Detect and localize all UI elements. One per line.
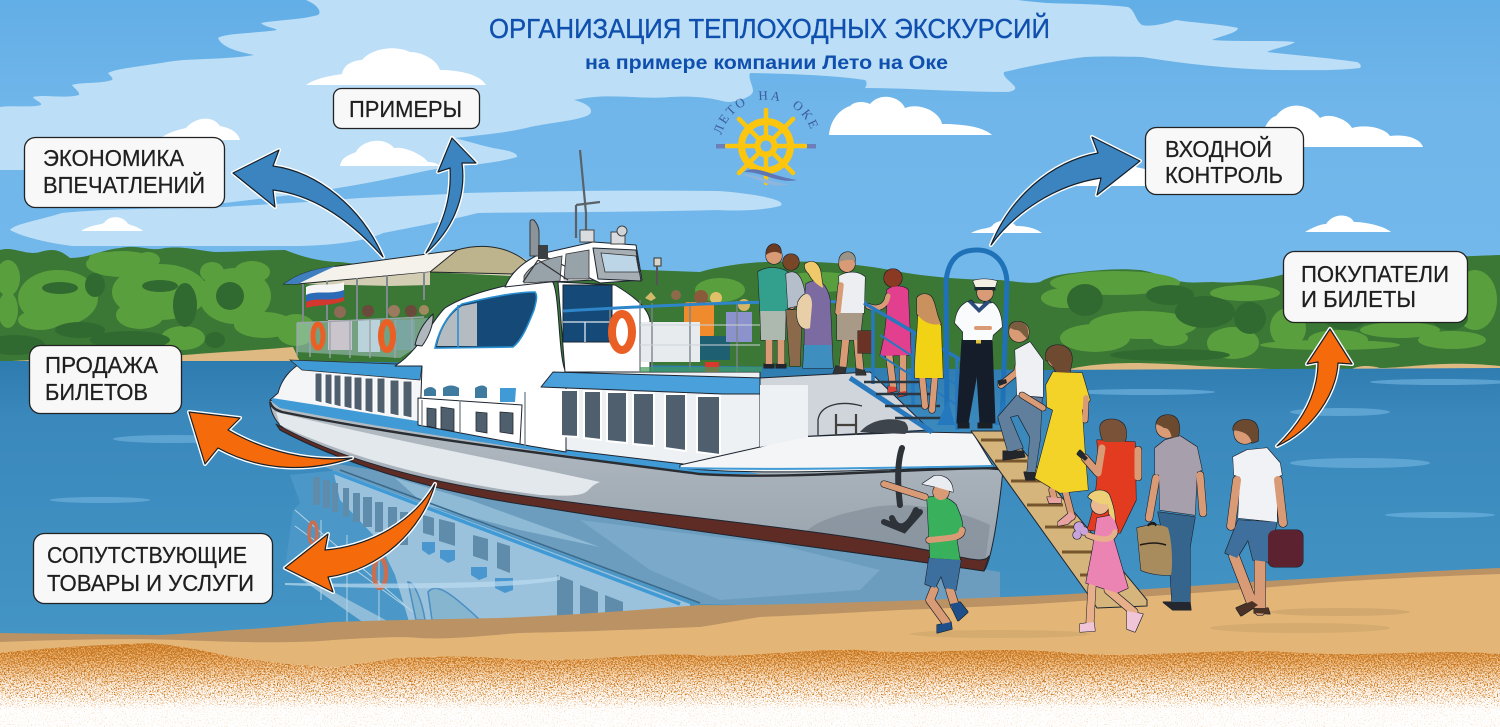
blonde woman in purple dress bbox=[797, 262, 833, 368]
label: ticket sales: ПРОДАЖА bbox=[45, 352, 159, 378]
label: related goods and services: ТОВАРЫ И УСЛУГИ bbox=[47, 570, 254, 596]
canopy frame and passengers behind bbox=[284, 246, 527, 358]
man in grey shirt bbox=[783, 254, 806, 366]
subtitle: на примере компании Лето на Оке bbox=[585, 53, 948, 74]
woman in pink dress bbox=[858, 269, 911, 397]
arrow: to economy of impressions bbox=[233, 150, 383, 257]
title: ОРГАНИЗАЦИЯ ТЕПЛОХОДНЫХ ЭКСКУРСИЙ bbox=[489, 13, 1050, 44]
main windows bbox=[561, 390, 720, 455]
label: economy of impressions: ЭКОНОМИКА bbox=[43, 145, 185, 171]
woman in red dress bbox=[1077, 419, 1138, 533]
label: economy of impressions: ВПЕЧАТЛЕНИЙ bbox=[43, 171, 205, 198]
ship reflection bbox=[285, 458, 1000, 625]
arrow: to related goods and services bbox=[285, 484, 435, 592]
dark panel window bbox=[563, 285, 612, 342]
white cumulus clouds bbox=[81, 48, 1423, 233]
river water bbox=[0, 361, 1500, 650]
deck standing passengers bbox=[758, 244, 1010, 432]
blue band aft bbox=[290, 360, 422, 380]
label: entrance control: ВХОДНОЙ bbox=[1165, 135, 1272, 162]
label: related goods and services bbox=[34, 534, 272, 604]
blue deck stripe bbox=[272, 398, 760, 474]
label: ticket sales bbox=[30, 346, 182, 414]
gate arch bbox=[946, 250, 1007, 425]
man with suitcase bbox=[1137, 415, 1203, 610]
arrow: to ticket sales bbox=[189, 412, 352, 467]
upper deck hull bbox=[395, 281, 566, 452]
label: entrance control bbox=[1146, 128, 1304, 194]
ship bbox=[270, 150, 1003, 571]
far beach strip bbox=[0, 347, 1500, 372]
girl in yellow dress bbox=[915, 294, 943, 410]
label: examples bbox=[334, 88, 480, 128]
girl in pink dress bbox=[1073, 490, 1143, 632]
arrow: to examples bbox=[426, 138, 476, 253]
deck rail and passengers bbox=[563, 290, 866, 372]
starboard awning bbox=[541, 372, 763, 394]
hull light panel bbox=[276, 412, 600, 496]
label: economy of impressions bbox=[24, 138, 224, 208]
forward white deck bbox=[680, 432, 993, 472]
man in teal shirt bbox=[758, 244, 793, 368]
cabin window bbox=[435, 292, 537, 347]
distant forest bbox=[0, 247, 1500, 372]
anchor bbox=[884, 448, 920, 530]
water highlights bbox=[50, 379, 1500, 518]
man in white shirt on deck bbox=[833, 252, 866, 375]
sand bbox=[0, 568, 1500, 720]
blue gangway stairs bbox=[850, 303, 961, 432]
bridge bbox=[505, 150, 661, 287]
label: buyers and tickets: ПОКУПАТЕЛИ bbox=[1301, 261, 1449, 287]
woman in yellow dress bbox=[1022, 345, 1090, 526]
upper white wall bbox=[558, 282, 650, 372]
label: related goods and services: СОПУТСТВУЮЩИЕ bbox=[47, 542, 247, 568]
grainy foreground sand bbox=[0, 640, 1500, 727]
brown waterline bbox=[276, 424, 989, 571]
lower superstructure bbox=[270, 362, 720, 470]
aft windows bbox=[315, 373, 412, 418]
hull bbox=[270, 400, 1003, 571]
label: buyers and tickets: И БИЛЕТЫ bbox=[1301, 286, 1416, 312]
man on gangway bbox=[998, 321, 1043, 480]
label: entrance control: КОНТРОЛЬ bbox=[1165, 162, 1283, 188]
seated passengers bbox=[684, 290, 752, 372]
boy pointing bbox=[884, 476, 968, 633]
life buoys bbox=[313, 314, 632, 350]
forward grey machinery housing bbox=[760, 372, 930, 447]
logo: ship wheel: ЛЕТО НА ОКЕ bbox=[714, 91, 818, 135]
mid windows block bbox=[418, 386, 525, 446]
pale high clouds bbox=[0, 0, 1361, 246]
arrow: to buyers and tickets bbox=[1277, 329, 1352, 446]
flag bbox=[306, 282, 344, 308]
logo: ship wheel bbox=[714, 91, 818, 186]
man with bag bbox=[1225, 420, 1303, 616]
arrow: to entrance control bbox=[991, 137, 1140, 245]
label: buyers and tickets bbox=[1284, 252, 1468, 322]
sailor checking tickets bbox=[937, 250, 1010, 428]
shore people bbox=[884, 321, 1303, 633]
wooden gangway bbox=[971, 431, 1147, 608]
label: ticket sales: БИЛЕТОВ bbox=[45, 379, 148, 405]
label: examples: ПРИМЕРЫ bbox=[349, 96, 462, 122]
sky background bbox=[0, 0, 1500, 372]
